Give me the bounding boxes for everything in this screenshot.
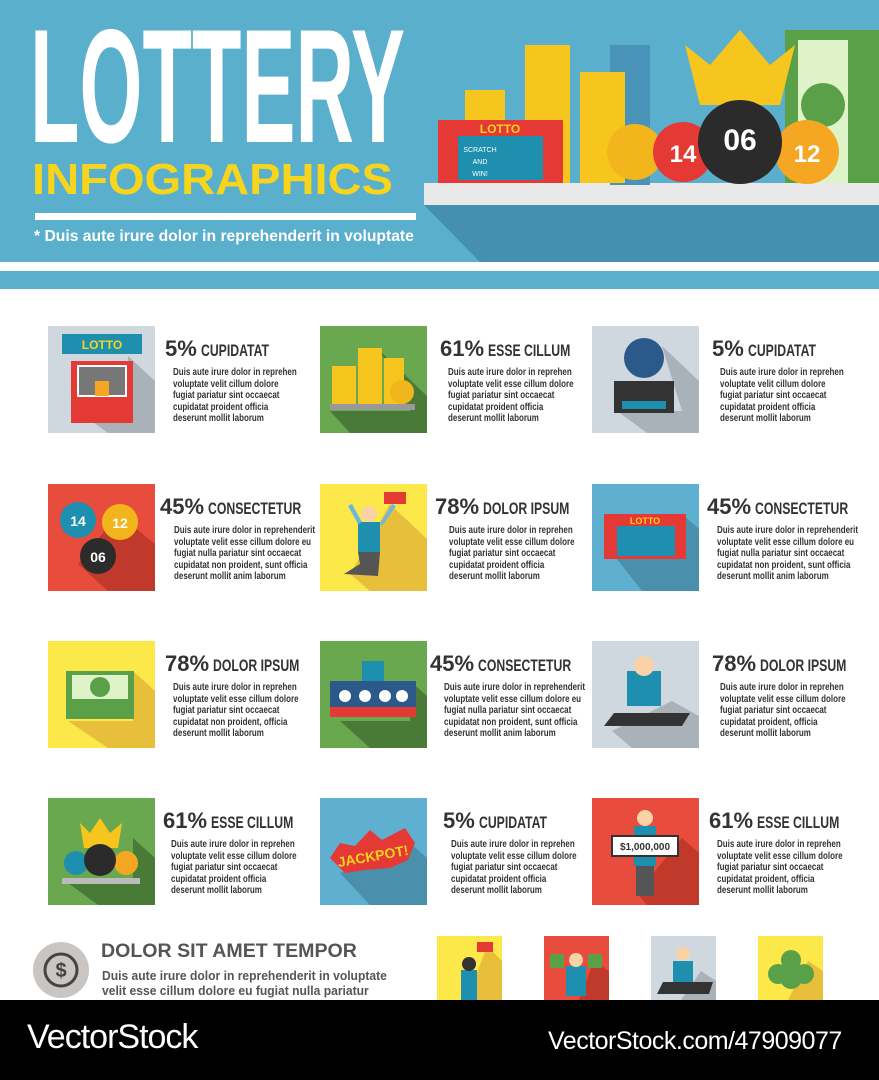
card 9: DOLOR IPSUM (760, 656, 846, 675)
card 1: voluptate velit cillum dolore (173, 378, 279, 390)
card 9: voluptate velit esse cillum dolore (720, 692, 846, 704)
card 12: voluptate velit esse cillum dolore (717, 850, 843, 862)
card 8 (320, 641, 585, 748)
card 9: cupidatat proident, officia (720, 716, 818, 728)
card 12: ESSE CILLUM (757, 813, 839, 832)
card 9: 78% (712, 651, 756, 676)
card 2: ESSE CILLUM (488, 341, 570, 360)
card 11: fugiat pariatur sint occaecat (451, 861, 557, 873)
card 2 (320, 326, 574, 433)
icon: frustrated man (592, 641, 699, 748)
card 10: deserunt mollit laborum (171, 884, 262, 896)
card 4 (48, 484, 315, 591)
card 11 (320, 798, 577, 905)
card 2: voluptate velit esse cillum dolore (448, 378, 574, 390)
card 3: 5% (712, 336, 744, 361)
card 1 (48, 326, 297, 433)
card 4: fugiat nulla pariatur sint occaecat (174, 547, 301, 559)
card 5: Duis aute irure dolor in reprehen (449, 524, 573, 536)
card 1: fugiat pariatur sint occaecat (173, 389, 279, 401)
icon: lotto booth: LOTTO (82, 338, 122, 352)
card 7: fugiat pariatur sint occaecat (173, 704, 279, 716)
card 7 (48, 641, 299, 748)
card 4: CONSECTETUR (208, 499, 301, 518)
card 12 (592, 798, 843, 905)
tagline: * Duis aute irure dolor in reprehenderit in voluptate (34, 228, 414, 245)
icon: coin stacks (320, 326, 427, 433)
hero illustration: 14 (670, 141, 697, 168)
card 3: CUPIDATAT (748, 341, 816, 360)
card 7: DOLOR IPSUM (213, 656, 299, 675)
footer watermark bar: VectorStock (27, 1018, 197, 1056)
card 6: deserunt mollit anim laborum (717, 570, 829, 582)
card 12: Duis aute irure dolor in reprehen (717, 838, 841, 850)
card 6: CONSECTETUR (755, 499, 848, 518)
card 10: cupidatat proident officia (171, 872, 266, 884)
card 4: deserunt mollit anim laborum (174, 570, 286, 582)
card 7: Duis aute irure dolor in reprehen (173, 681, 297, 693)
card 3: deserunt mollit laborum (720, 412, 811, 424)
card 3: cupidatat proident officia (720, 400, 815, 412)
icon: million winner (592, 798, 699, 905)
hero illustration (424, 30, 879, 262)
icon: dollar coin: $ (55, 960, 67, 982)
card 5: fugiat pariatur sint occaecat (449, 547, 555, 559)
card 9: deserunt mollit laborum (720, 727, 811, 739)
card 5: voluptate velit esse cillum dolore (449, 536, 575, 548)
card 8: voluptate velit esse cillum dolore eu (444, 692, 581, 704)
card 8: CONSECTETUR (478, 656, 571, 675)
icon: man with money (544, 936, 609, 1000)
icon: ball machine (320, 641, 427, 748)
icon: jackpot burst: JACKPOT! (336, 842, 410, 870)
icon: lottery balls: 12 (112, 515, 128, 531)
icon: money bags (758, 936, 823, 1000)
hero illustration: 06 (723, 124, 757, 157)
icon: crown and balls (48, 798, 155, 905)
card 8: Duis aute irure dolor in reprehenderit (444, 681, 585, 693)
card 8: 45% (430, 651, 474, 676)
icon: lottery balls: 14 (70, 513, 86, 529)
card 10 (48, 798, 297, 905)
card 3: voluptate velit cillum dolore (720, 378, 826, 390)
hero illustration: LOTTO (480, 122, 520, 136)
card 1: CUPIDATAT (201, 341, 269, 360)
card 10: ESSE CILLUM (211, 813, 293, 832)
icon: lottery balls: 06 (90, 549, 106, 565)
card 8: fugiat nulla pariatur sint occaecat (444, 704, 571, 716)
footer heading: DOLOR SIT AMET TEMPOR (101, 941, 357, 962)
subtitle heading: INFOGRAPHICS (32, 155, 393, 204)
icon: lotto booth (48, 326, 155, 433)
card 1: 5% (165, 336, 197, 361)
header stripe (0, 271, 879, 289)
footer text: Duis aute irure dolor in reprehenderit in voluptate (102, 968, 387, 983)
title: LOTTERY (30, 0, 405, 177)
card 3: Duis aute irure dolor in reprehen (720, 366, 844, 378)
card 10: voluptate velit esse cillum dolore (171, 850, 297, 862)
card 1: Duis aute irure dolor in reprehen (173, 366, 297, 378)
hero illustration: AND (473, 159, 487, 166)
card 5: deserunt mollit laborum (449, 570, 540, 582)
card 7: deserunt mollit laborum (173, 727, 264, 739)
card 6 (592, 484, 858, 591)
footer watermark bar (0, 1000, 879, 1080)
icon: lotto ticket: LOTTO (630, 516, 660, 526)
icon: jackpot burst (320, 798, 427, 905)
card 10: fugiat pariatur sint occaecat (171, 861, 277, 873)
card 11: deserunt mollit laborum (451, 884, 542, 896)
card 12: cupidatat proident, officia (717, 872, 815, 884)
footer text (102, 968, 387, 998)
card 2: fugiat pariatur sint occaecat (448, 389, 554, 401)
card 11: cupidatat proident officia (451, 872, 546, 884)
card 8: cupidatat non proident, sunt officia (444, 716, 577, 728)
card 1: deserunt mollit laborum (173, 412, 264, 424)
card 12: deserunt mollit laborum (717, 884, 808, 896)
card 2: Duis aute irure dolor in reprehen (448, 366, 572, 378)
small icons (437, 936, 823, 1000)
icon: money stack (48, 641, 155, 748)
header background (0, 0, 879, 262)
icon: lotto ticket (592, 484, 699, 591)
card 11: Duis aute irure dolor in reprehen (451, 838, 575, 850)
card 10: Duis aute irure dolor in reprehen (171, 838, 295, 850)
divider bar (35, 213, 416, 220)
card 6: fugiat nulla pariatur sint occaecat (717, 547, 844, 559)
card 3 (592, 326, 844, 433)
card 9: fugiat pariatur sint occaecat (720, 704, 826, 716)
card 5: DOLOR IPSUM (483, 499, 569, 518)
card 4: cupidatat non proident, sunt officia (174, 558, 307, 570)
card 11: voluptate velit esse cillum dolore (451, 850, 577, 862)
card 6: 45% (707, 494, 751, 519)
card 9 (592, 641, 846, 748)
card 5: 78% (435, 494, 479, 519)
icon: woman with ticket (437, 936, 502, 1000)
card 5: cupidatat proident officia (449, 558, 544, 570)
card 6: cupidatat non proident, sunt officia (717, 558, 850, 570)
icon: man at desk (651, 936, 716, 1000)
card 1: cupidatat proident officia (173, 400, 268, 412)
card 8: deserunt mollit anim laborum (444, 727, 556, 739)
card 7: cupidatat non proident, officia (173, 716, 287, 728)
card 11: CUPIDATAT (479, 813, 547, 832)
hero illustration: WIN! (472, 171, 488, 178)
icon: dollar coin (33, 942, 89, 998)
card 10: 61% (163, 808, 207, 833)
card 2: deserunt mollit laborum (448, 412, 539, 424)
card 7: 78% (165, 651, 209, 676)
card 4: Duis aute irure dolor in reprehenderit (174, 524, 315, 536)
card 6: voluptate velit esse cillum dolore eu (717, 536, 854, 548)
card 5 (320, 484, 575, 591)
hero illustration: SCRATCH (463, 147, 497, 154)
footer watermark bar: VectorStock.com/47909077 (548, 1027, 842, 1055)
card 2: cupidatat proident officia (448, 400, 543, 412)
card 2: 61% (440, 336, 484, 361)
card 4: voluptate velit esse cillum dolore eu (174, 536, 311, 548)
card 6: Duis aute irure dolor in reprehenderit (717, 524, 858, 536)
icon: lottery balls (48, 484, 155, 591)
card 4: 45% (160, 494, 204, 519)
card 3: fugiat pariatur sint occaecat (720, 389, 826, 401)
icon: jumping winner (320, 484, 427, 591)
card 9: Duis aute irure dolor in reprehen (720, 681, 844, 693)
icon: million winner: $1,000,000 (620, 842, 670, 853)
hero illustration: 12 (794, 141, 820, 168)
footer text: velit esse cillum dolore eu fugiat nulla pariatur (102, 983, 369, 998)
card 12: 61% (709, 808, 753, 833)
card 11: 5% (443, 808, 475, 833)
card 12: fugiat pariatur sint occaecat (717, 861, 823, 873)
card 7: voluptate velit esse cillum dolore (173, 692, 299, 704)
icon: lottery machine (592, 326, 699, 433)
